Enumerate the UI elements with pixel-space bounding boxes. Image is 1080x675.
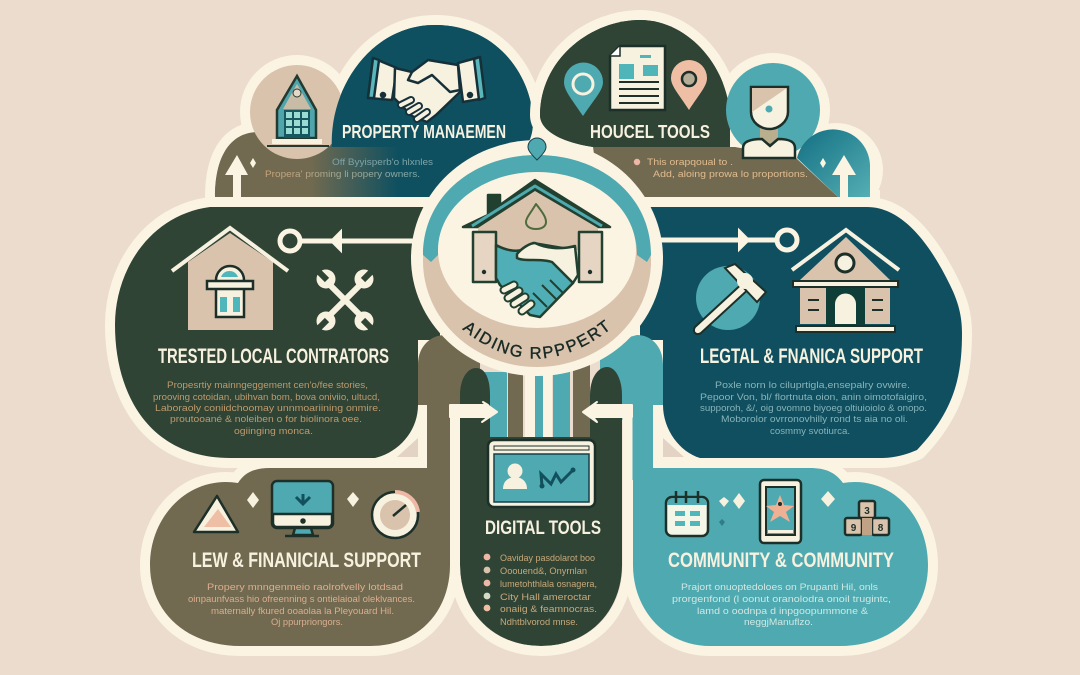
icon: hammer xyxy=(694,264,766,334)
list: digital tools bullets: lumetohthlala osnagera, xyxy=(500,579,597,590)
panel: digital tools xyxy=(455,367,628,651)
text: community body: Prajort onuoptedoloes on Prupanti Hil, onls xyxy=(681,582,878,593)
icon: bank building xyxy=(792,230,899,332)
arrow: up left xyxy=(225,155,248,197)
text: law body: oinpaunfvass hio ofreenning s ontielaioal oleklvances. xyxy=(188,594,415,605)
icon: blocks xyxy=(845,501,889,535)
icon: browser window xyxy=(488,440,595,507)
list: digital tools bullets: Ndhtblvorod mnse. xyxy=(500,617,578,628)
heading: digital tools: DIGITAL TOOLS xyxy=(485,518,601,539)
heading: property management: PROPERTY MANAEMEN xyxy=(342,122,506,142)
text: legal body: Moborolor ovrronovhilly rond ts aia no oli. xyxy=(721,414,908,425)
text: contractors body xyxy=(153,380,381,437)
arrow: into digital right xyxy=(583,402,632,422)
panel: trusted local contractors xyxy=(115,207,440,467)
list: digital tools bullets: Ooouend&, Onyrnlan xyxy=(500,566,587,577)
icon: blocks: 8 xyxy=(878,523,884,534)
icon: sparkles xyxy=(247,492,359,508)
text: community body: lamd o oodnpa d inpgoopummone & xyxy=(697,606,869,617)
panel: property management xyxy=(215,25,533,197)
text: law body: Oj ppurpriongors. xyxy=(271,617,343,628)
icon: crossed wrenches xyxy=(316,270,374,330)
icon: sparkle xyxy=(250,158,256,168)
curve path definition for hub label xyxy=(462,327,613,359)
text: community body xyxy=(672,582,891,628)
text: property management body: Off Byyisperb'o hlxnles xyxy=(332,157,433,168)
arrow: into digital left xyxy=(450,402,497,422)
heading: trusted local contractors: TRESTED LOCAL CONTRATORS xyxy=(158,345,389,368)
icon: sparkles xyxy=(719,491,835,526)
label: aiding rppert: AIDING RPPPERT xyxy=(462,319,608,359)
text: contractors body: prooving cotoidan, ubihvan bom, bova oniviio, ultucd, xyxy=(153,392,380,403)
heading: legal and financial support: LEGTAL & FNANICA SUPPORT xyxy=(700,345,923,368)
text: law body: Propery mnngenmeio raolrofvelly lotdsad xyxy=(207,582,403,593)
center hub: aiding rppert xyxy=(411,138,663,376)
text: housing tools body: This orapqoual to . xyxy=(647,157,733,168)
text: contractors body: Laboraoly coniidchoomay unnmoariining onmire. xyxy=(155,403,381,414)
list: digital tools bullets: Oaviday pasdolarot boo xyxy=(500,553,595,564)
icon: phone xyxy=(760,480,801,543)
text: law body xyxy=(188,582,415,628)
list: digital tools bullets xyxy=(484,553,597,628)
icon: sparkle right xyxy=(820,158,826,168)
text: legal body xyxy=(700,380,927,437)
heading: housing tools: HOUCEL TOOLS xyxy=(590,122,710,142)
list: digital tools bullets: onaiig & feamnocras. xyxy=(500,604,597,615)
icon: person xyxy=(743,87,795,158)
text: contractors body: proutooané & noleiben o for biolinora oee. xyxy=(170,414,362,425)
text: law body: maternally fkured ooaolaa la Pleyouard Hil. xyxy=(211,606,394,617)
arrow: key connector left xyxy=(280,231,425,251)
text: community body: neggjManuflzo. xyxy=(744,617,813,628)
heading: community: COMMUNITY & COMMUNITY xyxy=(668,549,894,572)
icon: peach map pin xyxy=(671,60,707,110)
arrow: key connector right xyxy=(655,230,797,250)
icon: blocks: 3 xyxy=(864,506,870,517)
text: housing tools body: Add, aloing prowa lo proportions. xyxy=(653,169,808,180)
icon: small house xyxy=(267,76,329,147)
panel: law and financial support xyxy=(150,468,450,646)
text: contractors body: Propesrtiy mainngeggement cen'o/fee stories, xyxy=(167,380,368,391)
icon: teal map pin xyxy=(564,62,603,116)
heading: law and financial support: LEW & FINANICIAL SUPPORT xyxy=(192,549,421,572)
column: teal connector xyxy=(600,335,663,480)
stripes: connectors into center xyxy=(483,365,590,442)
text: legal body: cosmmy svotiurca. xyxy=(770,426,850,437)
panel: legal and financial support xyxy=(640,207,962,467)
icon: house with handshake xyxy=(463,180,610,317)
text: community body: prorgenfond (l oonut oranolodra onoil trugintc, xyxy=(672,594,891,605)
panel: housing tools xyxy=(540,20,883,217)
panel: community xyxy=(633,468,928,646)
text: property management body: Propera' proming li popery owners. xyxy=(265,169,420,180)
icon: house xyxy=(172,228,288,330)
list: digital tools bullets: City Hall ameroctar xyxy=(500,592,591,603)
column: olive connector xyxy=(418,335,480,480)
icon: blocks: 9 xyxy=(851,523,857,534)
text: property management body xyxy=(265,157,433,180)
icon: monitor xyxy=(272,481,333,536)
icon: calendar xyxy=(666,491,708,536)
icon: handshake xyxy=(368,57,485,122)
text: legal body: Poxle norn lo ciluprtigla,ensepalry ovwire. xyxy=(715,380,910,391)
icon: document xyxy=(610,46,665,110)
text: contractors body: ogiinging monca. xyxy=(234,426,313,437)
icon: teal pin xyxy=(528,138,546,160)
text: housing tools body xyxy=(634,157,808,180)
text: legal body: Pepoor Von, bl/ flortnuta oion, anin oimotofaigiro, xyxy=(700,392,927,403)
icon: gauge xyxy=(372,492,418,538)
icon: triangle xyxy=(194,496,238,532)
arrow: up right xyxy=(832,155,856,197)
text: legal body: supporoh, &/, oig ovomno biyoeg oltiuioiolo & onopo. xyxy=(700,403,927,414)
